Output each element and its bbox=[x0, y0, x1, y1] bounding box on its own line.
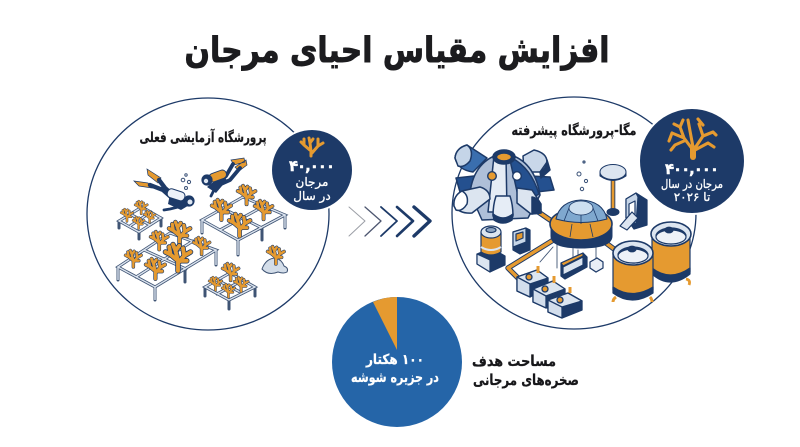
central pod bbox=[550, 200, 612, 248]
pie caption: صخره‌های مرجانی bbox=[473, 371, 579, 389]
small cube bbox=[590, 258, 603, 272]
icon: coral bbox=[301, 138, 323, 156]
control panel box bbox=[561, 253, 587, 279]
table frames bbox=[118, 197, 285, 309]
badge label: مرجان bbox=[296, 175, 328, 190]
gate unit with stairs bbox=[620, 193, 647, 230]
domed habitat bbox=[454, 145, 554, 223]
pie caption bbox=[472, 352, 579, 389]
corals on tables bbox=[121, 186, 272, 297]
title: افزایش مقیاس احیای مرجان bbox=[184, 31, 610, 71]
badge label line two: در سال bbox=[293, 189, 331, 204]
icon: large coral bbox=[669, 119, 716, 157]
pie value: ۱۰۰ هکتار bbox=[365, 352, 424, 368]
badge number: ۴۰,۰۰۰ bbox=[289, 157, 335, 175]
panel circle bbox=[452, 97, 696, 329]
antenna dish bbox=[600, 164, 626, 216]
arrow: progression chevrons bbox=[349, 207, 430, 236]
panel heading: پرورشگاه آزمایشی فعلی bbox=[140, 128, 266, 146]
pipes bbox=[508, 209, 618, 290]
pie slice bbox=[373, 297, 397, 350]
panel: current pilot nursery bbox=[87, 98, 354, 330]
pie caption: مساحت هدف bbox=[472, 352, 556, 370]
control monitor bbox=[513, 228, 530, 254]
diver two bbox=[201, 158, 247, 196]
badge: 40,000 corals per year bbox=[270, 128, 354, 212]
badge number: ۴۰۰,۰۰۰ bbox=[665, 160, 719, 178]
badge: 400,000 corals per year by 2026 bbox=[638, 107, 746, 215]
pie location: در جزیره شوشه bbox=[351, 370, 439, 386]
badge label: مرجان در سال bbox=[661, 177, 723, 192]
pie chart: target area bbox=[332, 297, 462, 427]
small tank on base bbox=[477, 226, 505, 272]
rock with coral bbox=[262, 247, 288, 273]
processing units bbox=[517, 266, 582, 318]
diver one bbox=[134, 169, 195, 210]
badge year: تا ۲۰۲۶ bbox=[674, 190, 710, 204]
panel heading: مگا-پرورشگاه پیشرفته bbox=[512, 122, 636, 139]
panel: advanced mega nursery bbox=[452, 97, 746, 329]
water bubbles bbox=[577, 161, 588, 191]
panel circle bbox=[87, 98, 329, 330]
air bubbles bbox=[181, 174, 191, 190]
large orange tanks bbox=[613, 222, 691, 302]
